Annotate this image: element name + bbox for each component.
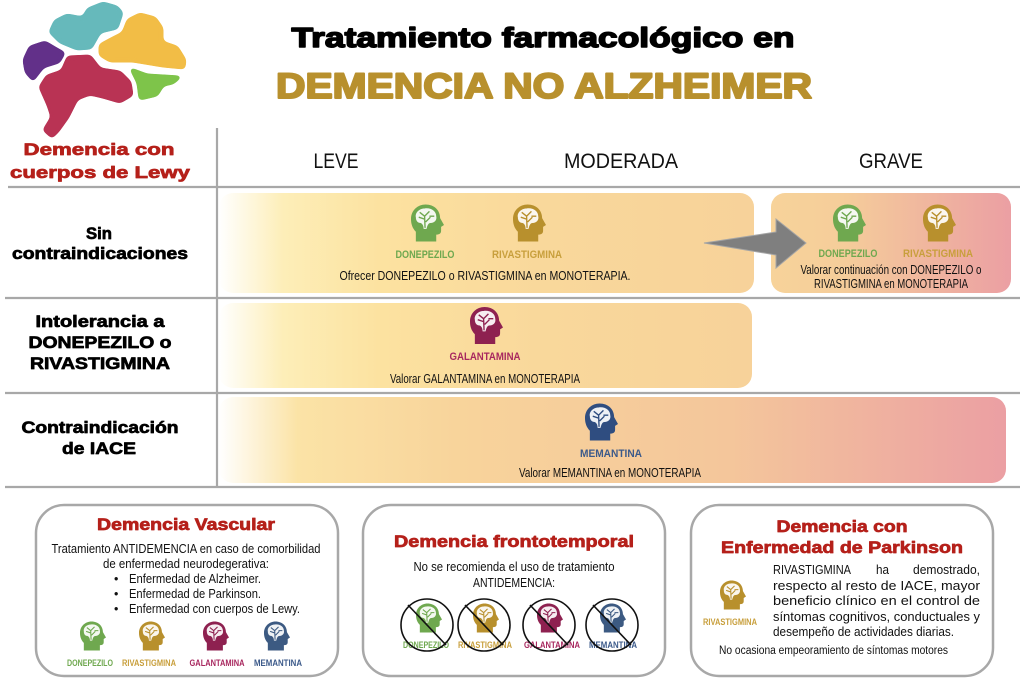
row label: Intolerancia xyxy=(28,313,172,373)
panel: contraindicacion de IACE: Valorar MEMANTINA en MONOTERAPIA xyxy=(519,466,702,480)
drug: donepezilo xyxy=(396,205,455,261)
drug: memantina: MEMANTINA xyxy=(580,448,642,460)
text block: Enfermedad con cuerpos de Lewy. xyxy=(129,602,300,616)
prohibited: donepezilo: DONEPEZILO xyxy=(403,640,449,651)
title xyxy=(276,22,812,106)
panel: sin contraindicaciones, leve-moderada xyxy=(219,193,754,293)
drug: rivastigmina xyxy=(122,621,176,669)
row label: Contraindicación de IACE: Contraindicación xyxy=(22,419,178,437)
prohibited: rivastigmina xyxy=(458,599,512,651)
severity column headers: LEVE xyxy=(314,150,358,173)
drug: galantamina xyxy=(450,307,521,363)
prohibited: galantamina xyxy=(523,599,580,651)
text block: RIVASTIGMINA xyxy=(773,563,852,577)
panel: Demencia frontotemporal xyxy=(363,505,665,676)
row label: Intolerancia: DONEPEZILO o xyxy=(28,334,172,352)
text block: No ocasiona empeoramiento de síntomas motores xyxy=(719,645,948,657)
title: DEMENCIA NO ALZHEIMER xyxy=(276,67,812,106)
drug: rivastigmina xyxy=(492,205,562,261)
heading: Demencia con cuerpos de Lewy: cuerpos de Lewy xyxy=(10,164,191,182)
panel: Demencia con Enfermedad de Parkinson xyxy=(691,505,993,676)
drug: rivastigmina: RIVASTIGMINA xyxy=(492,249,562,261)
heading: Demencia frontotemporal xyxy=(394,533,634,551)
text block: de enfermedad neurodegerativa: xyxy=(103,557,269,571)
text block: desempeño de actividades diarias. xyxy=(773,625,954,639)
drug: memantina xyxy=(580,404,642,460)
drug: galantamina: GALANTAMINA xyxy=(190,658,245,669)
text block: • xyxy=(114,587,118,601)
prohibited: donepezilo xyxy=(401,599,453,651)
text block xyxy=(414,560,615,590)
text block: ANTIDEMENCIA: xyxy=(473,576,555,590)
drug: memantina: MEMANTINA xyxy=(254,658,302,669)
prohibited: rivastigmina: RIVASTIGMINA xyxy=(458,640,512,651)
table grid lines xyxy=(5,128,1020,487)
text block xyxy=(52,542,321,616)
text block: No se recomienda el uso de tratamiento xyxy=(414,560,615,574)
text block: Enfermedad de Parkinson. xyxy=(129,587,261,601)
text block: síntomas cognitivos, conductuales y xyxy=(773,610,981,624)
row label: Intolerancia: Intolerancia a xyxy=(36,313,165,331)
prohibited: memantina xyxy=(586,599,638,651)
prohibited: memantina: MEMANTINA xyxy=(589,640,637,651)
drug: galantamina xyxy=(190,621,245,669)
row label: Sin contraindicaciones xyxy=(12,225,188,263)
text block: ha xyxy=(876,563,889,577)
drug: donepezilo grave: DONEPEZILO xyxy=(818,248,878,260)
row label: Sin contraindicaciones: contraindicaciones xyxy=(12,245,188,263)
prohibited: galantamina: GALANTAMINA xyxy=(524,640,580,651)
drug: galantamina: GALANTAMINA xyxy=(450,351,521,363)
heading: Demencia con xyxy=(776,518,908,536)
text block xyxy=(719,563,981,657)
drug: rivastigmina grave: RIVASTIGMINA xyxy=(903,248,973,260)
drug: rivastigmina xyxy=(703,580,757,628)
heading: Enfermedad de Parkinson xyxy=(721,539,963,557)
panel: Demencia Vascular xyxy=(36,505,338,676)
panel: sin contraindicaciones, grave: RIVASTIGMINA en MONOTERAPIA xyxy=(814,277,969,291)
severity column headers: GRAVE xyxy=(859,150,923,173)
text block: respecto al resto de IACE, mayor xyxy=(773,579,980,593)
drug: memantina xyxy=(254,621,302,669)
text block: • xyxy=(114,572,118,586)
heading xyxy=(721,518,963,557)
drug: rivastigmina grave xyxy=(903,205,973,260)
text block: beneficio clínico en el control de xyxy=(773,594,980,608)
text block: Tratamiento ANTIDEMENCIA en caso de comorbilidad xyxy=(52,542,321,556)
drug: rivastigmina: RIVASTIGMINA xyxy=(703,617,757,628)
drug: donepezilo: DONEPEZILO xyxy=(67,658,113,669)
panel: sin contraindicaciones, grave xyxy=(771,193,1011,293)
brain logo xyxy=(24,3,185,137)
row label: Contraindicación de IACE: de IACE xyxy=(62,440,136,458)
text block: • xyxy=(114,602,118,616)
row label: Intolerancia: RIVASTIGMINA xyxy=(30,355,170,373)
severity column headers xyxy=(314,150,923,173)
title: Tratamiento farmacológico en xyxy=(292,22,794,53)
arrow xyxy=(704,219,806,268)
text block: demostrado, xyxy=(913,563,980,577)
panel: intolerancia xyxy=(219,303,752,388)
severity column headers: MODERADA xyxy=(564,150,678,173)
heading: Demencia con cuerpos de Lewy: Demencia con xyxy=(24,141,174,159)
heading: Demencia con cuerpos de Lewy xyxy=(10,141,191,182)
row label: Sin contraindicaciones: Sin xyxy=(86,225,112,243)
drug: donepezilo: DONEPEZILO xyxy=(396,249,455,261)
drug: donepezilo xyxy=(67,621,113,669)
heading: Demencia Vascular xyxy=(97,516,276,534)
row label: Contraindicación de IACE xyxy=(22,419,178,458)
drug: rivastigmina: RIVASTIGMINA xyxy=(122,658,176,669)
panel: sin contraindicaciones, leve-moderada: Ofrecer DONEPEZILO o RIVASTIGMINA en MONOTERAPIA. xyxy=(340,269,630,283)
text block: Enfermedad de Alzheimer. xyxy=(129,572,261,586)
drug: donepezilo grave xyxy=(818,205,878,260)
panel: intolerancia: Valorar GALANTAMINA en MONOTERAPIA xyxy=(390,372,581,386)
panel: contraindicacion de IACE xyxy=(219,397,1006,483)
